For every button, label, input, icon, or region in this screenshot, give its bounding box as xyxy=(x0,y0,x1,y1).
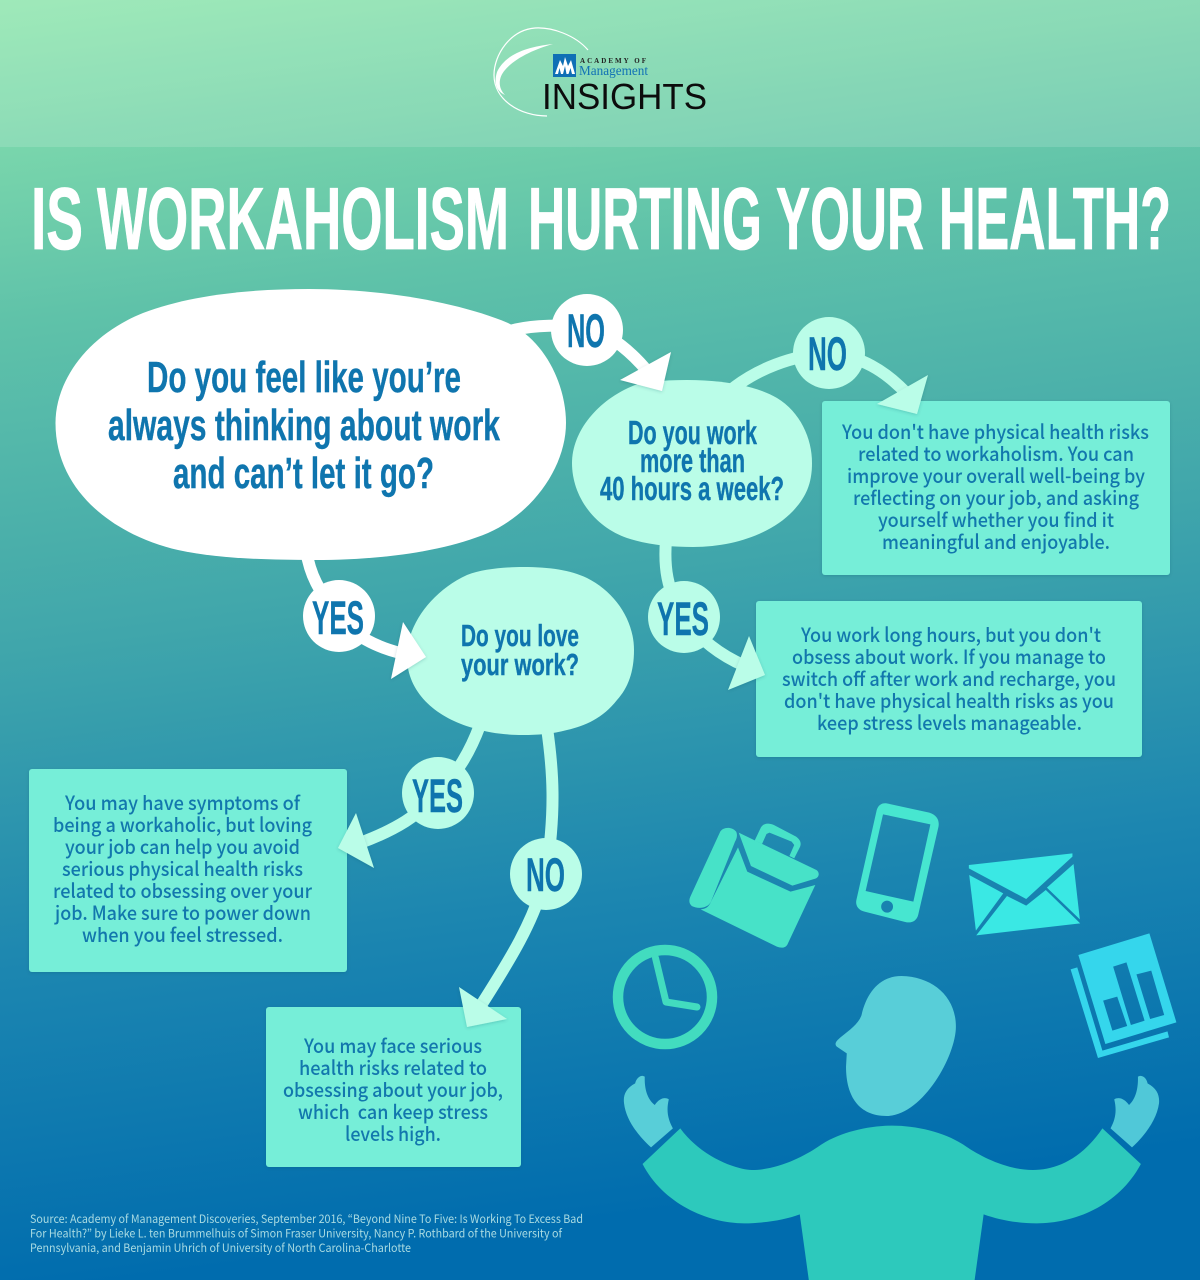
source text: Source: Academy of Management Discoveries, September 2016, “Beyond Nine To Five: Is Working To Excess Bad xyxy=(30,1211,583,1227)
label: NO, hours question xyxy=(793,317,865,389)
box: long hours: keep stress levels manageable. xyxy=(817,707,1082,736)
logo: Academy of Management Insights: Management xyxy=(579,64,648,79)
label: YES, first question xyxy=(303,580,375,652)
box: serious health risks: health risks related to xyxy=(299,1052,487,1081)
box: serious health risks: obsessing about your job, xyxy=(283,1074,503,1103)
bubble: love your work xyxy=(407,567,634,735)
arrow: hours question NO to no-risk box xyxy=(725,353,908,395)
box: no physical risks: meaningful and enjoyable. xyxy=(882,526,1110,555)
arrowhead: into symptoms box xyxy=(338,813,374,868)
label: YES, hours question: YES xyxy=(657,592,709,645)
label: NO, first question xyxy=(551,294,623,366)
arrow: love question YES to symptoms box xyxy=(360,725,480,843)
box: no physical risks: yourself whether you find it xyxy=(878,504,1114,533)
title: WORKAHOLISM xyxy=(97,169,509,268)
logo: Academy of Management Insights: ACADEMY OF xyxy=(580,57,646,65)
source text: Pennsylvania, and Benjamin Uhrich of University of North Carolina-Charlotte xyxy=(30,1240,411,1256)
box: long hours xyxy=(756,601,1142,757)
icon: clock xyxy=(618,950,712,1044)
box: symptoms of workaholic: serious physical health risks xyxy=(62,853,303,882)
box: symptoms of workaholic: related to obsessing over your xyxy=(53,875,312,904)
bubble: more than 40 hours: Do you work xyxy=(628,414,757,451)
flowchart xyxy=(29,289,1170,1167)
bubble: always thinking about work: always thinking about work xyxy=(108,401,500,450)
logo: Academy of Management Insights: INSIGHTS xyxy=(542,76,707,117)
bubble: love your work: Do you love xyxy=(461,618,579,653)
label: NO, love question xyxy=(510,838,582,910)
box: long hours: You work long hours, but you don't xyxy=(800,619,1101,648)
label: NO, first question: NO xyxy=(567,304,605,357)
arrow: love question NO to serious-risk box xyxy=(478,728,553,1010)
logo: Academy of Management Insights xyxy=(494,28,707,117)
arrowhead: into love question xyxy=(391,622,426,679)
title xyxy=(31,169,1171,268)
icon: envelope xyxy=(969,853,1080,935)
arrowhead: into no-risk box xyxy=(877,375,928,414)
person: body and arms xyxy=(643,1126,1141,1280)
box: no physical risks xyxy=(822,401,1170,575)
person: head xyxy=(836,976,956,1116)
label: NO, hours question: NO xyxy=(808,327,847,380)
icon: bar chart report xyxy=(1071,933,1176,1058)
bubble: always thinking about work: Do you feel like you’re xyxy=(147,353,461,402)
bubble: always thinking about work: and can’t let it go? xyxy=(173,449,434,498)
bubble: more than 40 hours xyxy=(572,380,812,547)
arrow: first question YES to love question xyxy=(306,550,400,653)
box: symptoms of workaholic: You may have symptoms of xyxy=(64,787,301,816)
box: serious health risks: which can keep stress xyxy=(298,1096,488,1125)
box: symptoms of workaholic: job. Make sure to power down xyxy=(54,897,311,926)
person: right hand xyxy=(1111,1076,1159,1147)
box: no physical risks: You don't have physical health risks xyxy=(841,416,1149,445)
label: YES, hours question xyxy=(648,581,720,653)
box: long hours: switch off after work and recharge, you xyxy=(782,663,1116,692)
illustration: person juggling work items xyxy=(624,803,1176,1280)
source text xyxy=(30,1211,583,1256)
label: YES, love question xyxy=(402,757,474,829)
box: symptoms of workaholic: when you feel stressed. xyxy=(82,919,283,948)
arrowhead: into hours question xyxy=(620,352,671,391)
box: no physical risks: reflecting on your job, and asking xyxy=(853,482,1139,511)
icon: briefcase xyxy=(689,824,819,948)
box: symptoms of workaholic: being a workaholic, but loving xyxy=(53,809,312,838)
arrowhead: into serious-risk box xyxy=(459,987,507,1027)
box: serious health risks: levels high. xyxy=(345,1118,441,1147)
bubble: always thinking about work xyxy=(56,289,566,560)
box: symptoms of workaholic xyxy=(29,769,347,972)
box: no physical risks: related to workaholism. You can xyxy=(858,438,1134,467)
box: serious health risks xyxy=(266,1007,521,1167)
label: YES, first question: YES xyxy=(312,591,364,644)
title: HURTING xyxy=(528,169,762,268)
person: left hand xyxy=(624,1076,673,1147)
title: YOUR xyxy=(776,169,924,268)
header band xyxy=(0,0,1200,147)
box: serious health risks: You may face serious xyxy=(303,1030,482,1059)
box: long hours: obsess about work. If you manage to xyxy=(792,641,1106,670)
source text: For Health?” by Lieke L. ten Brummelhuis of Simon Fraser University, Nancy P. Rothbard of the University of xyxy=(30,1226,563,1242)
box: long hours: don't have physical health risks as you xyxy=(784,685,1114,714)
label: YES, love question: YES xyxy=(412,769,463,822)
icon: smartphone xyxy=(856,803,939,922)
arrow: first question NO to hours question xyxy=(500,326,648,372)
box: no physical risks: improve your overall well-being by xyxy=(847,460,1145,489)
label: NO, love question: NO xyxy=(526,848,565,901)
bubble: more than 40 hours: more than xyxy=(640,442,745,479)
arrowhead: into long-hours box xyxy=(728,636,765,690)
title: IS xyxy=(31,169,83,268)
arrow: hours question YES to long-hours box xyxy=(665,540,745,666)
bubble: love your work: your work? xyxy=(461,647,579,682)
bubble: more than 40 hours: 40 hours a week? xyxy=(600,470,784,507)
box: symptoms of workaholic: your job can help you avoid xyxy=(65,831,300,860)
